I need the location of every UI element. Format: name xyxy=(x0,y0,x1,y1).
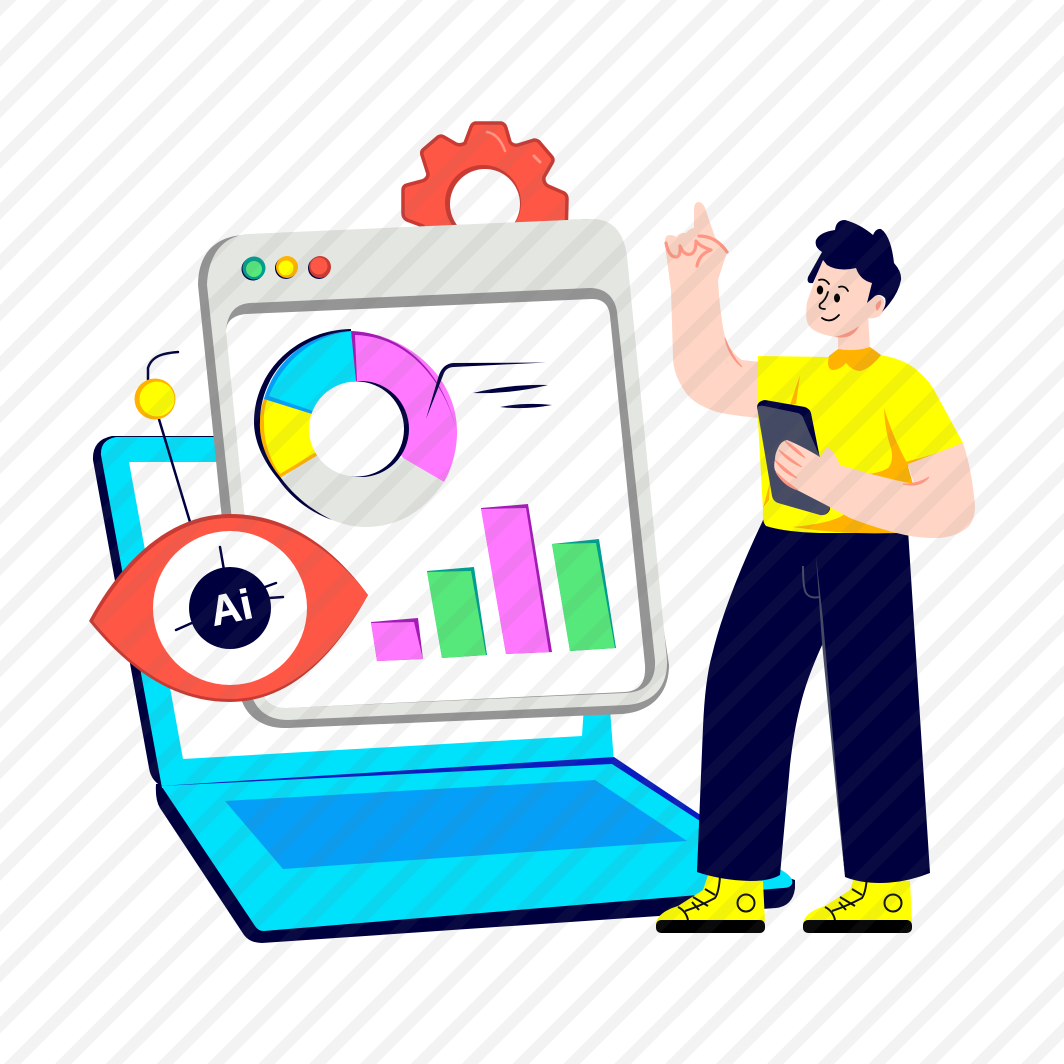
shirt folds xyxy=(763,375,963,533)
gear icon xyxy=(403,123,567,241)
callout lines xyxy=(426,362,552,419)
iris xyxy=(153,531,307,685)
laptop xyxy=(93,436,795,943)
navy outline xyxy=(254,329,351,520)
laptop lid shadow xyxy=(93,436,300,790)
holding arm xyxy=(774,440,975,538)
eye shape xyxy=(89,514,368,702)
shoes xyxy=(656,875,912,933)
elbow crease xyxy=(725,338,742,367)
head xyxy=(806,250,885,337)
chin shade xyxy=(835,326,859,338)
raised arm xyxy=(665,202,760,418)
donut chart xyxy=(254,329,457,527)
bar chart xyxy=(371,504,616,661)
browser window xyxy=(198,219,669,728)
inner bevel xyxy=(226,288,655,708)
ear xyxy=(876,300,881,311)
segment: yellow xyxy=(260,399,317,479)
segment: pink xyxy=(351,331,457,482)
window buttons xyxy=(242,256,331,280)
trousers xyxy=(697,518,930,883)
donut hole xyxy=(313,381,409,477)
pocket xyxy=(803,566,819,598)
trouser crease xyxy=(816,556,845,877)
neck xyxy=(838,315,870,353)
laptop base shadow xyxy=(156,780,795,943)
finger lines xyxy=(666,236,727,266)
shirt xyxy=(757,355,963,533)
eye with Ai xyxy=(89,514,368,702)
Ai label: Ai xyxy=(206,580,257,635)
antenna xyxy=(134,352,190,522)
laptop lid xyxy=(101,437,614,788)
keyboard xyxy=(225,780,687,869)
hinge line xyxy=(160,757,702,821)
face details xyxy=(817,280,848,320)
person xyxy=(656,202,975,933)
pupil xyxy=(189,567,271,649)
segment: grey xyxy=(278,454,444,527)
hair xyxy=(808,220,901,312)
tablet xyxy=(757,400,830,515)
laptop screen xyxy=(129,462,600,759)
hand lines xyxy=(775,441,929,490)
laptop base xyxy=(162,762,792,931)
ticks xyxy=(176,547,283,630)
collar xyxy=(828,347,881,371)
window viewport xyxy=(226,299,645,708)
segment: cyan xyxy=(264,331,356,413)
window outer shell xyxy=(198,219,669,728)
window frame xyxy=(207,219,667,720)
